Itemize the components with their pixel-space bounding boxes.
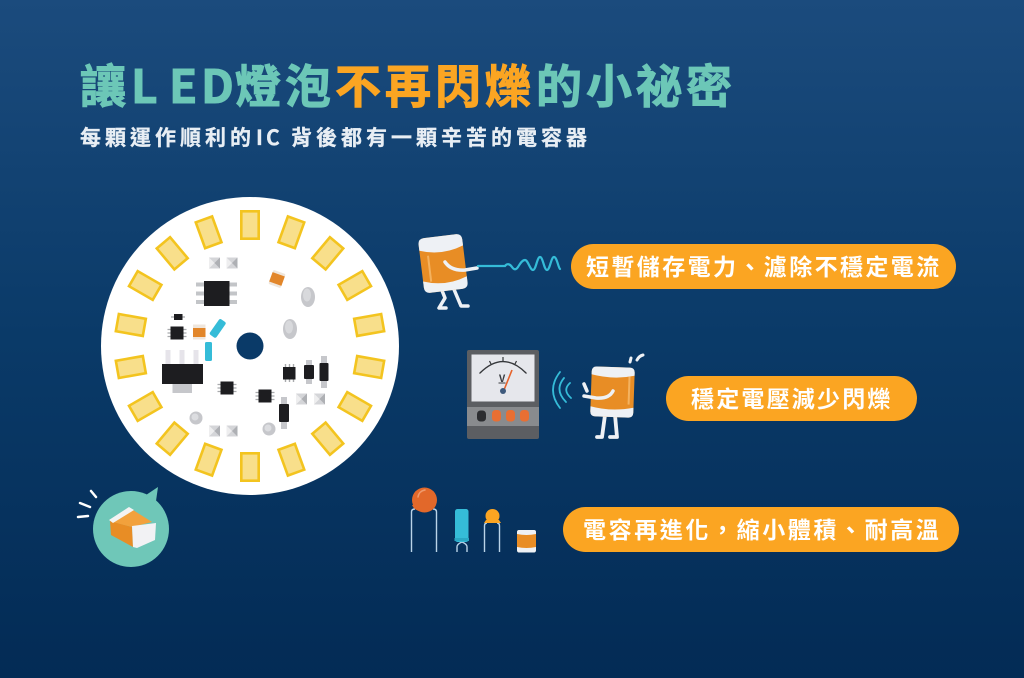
orange disc capacitor: [412, 488, 437, 552]
arm: [445, 262, 477, 270]
legs: [439, 287, 468, 308]
capacitor character pulling current: [418, 234, 560, 308]
legs: [597, 415, 617, 437]
subtitle: 的: [491, 122, 512, 152]
body: [590, 366, 635, 418]
title: D: [201, 51, 234, 117]
solder balls: [190, 412, 276, 436]
subtitle: 顆: [105, 122, 126, 152]
yellow disc capacitor: [484, 509, 501, 552]
current wave: [478, 257, 560, 270]
pill: store power: 短暫儲存電力、濾除不穩定電流: [586, 248, 942, 282]
pill: stabilize voltage: [666, 376, 917, 421]
orange chip capacitor: [268, 270, 286, 288]
subtitle: 苦: [466, 122, 487, 152]
title: 的: [536, 51, 582, 117]
terminal panel: [467, 407, 539, 426]
subtitle: 有: [366, 122, 387, 152]
subtitle: 顆: [416, 122, 437, 152]
highlight ticks: [78, 491, 96, 517]
center mounting hole: [236, 332, 264, 360]
chip capacitor: [109, 507, 156, 548]
subtitle: 一: [391, 122, 412, 152]
subtitle: 後: [316, 122, 337, 152]
cyan electrolytic capacitor: [454, 509, 469, 552]
lower ICs: [218, 364, 296, 402]
LED circuit board: [101, 197, 399, 495]
title: 再: [385, 51, 431, 117]
main IC chip: [196, 281, 237, 306]
title: 爍: [485, 51, 531, 117]
sweat drops: [630, 355, 643, 362]
voltmeter: V: [498, 370, 506, 385]
subtitle: 背: [291, 122, 312, 152]
title: 讓: [80, 51, 126, 117]
signal waves: [553, 372, 571, 408]
voltmeter: [467, 350, 539, 439]
LED ring: [116, 211, 384, 481]
subtitle: 電: [516, 122, 537, 152]
small left ICs: [168, 314, 186, 340]
subtitle: 運: [130, 122, 151, 152]
title: 小: [586, 51, 632, 117]
pill: stabilize voltage: 穩定電壓減少閃爍: [691, 380, 893, 414]
subtitle: I: [256, 122, 263, 152]
capacitor character beside voltmeter: [584, 355, 643, 437]
title: 祕: [636, 51, 682, 117]
orange capacitor: [193, 324, 206, 340]
subtitle: C: [266, 122, 280, 152]
title: E: [169, 51, 197, 117]
title: 燈: [235, 51, 281, 117]
icon: speech bubble with chip capacitor: [78, 487, 169, 567]
pill: store power: [571, 244, 956, 289]
title: 不: [335, 51, 381, 117]
title: L: [131, 51, 158, 117]
subtitle: 都: [341, 122, 362, 152]
capacitor family: [412, 488, 536, 552]
subtitle: 順: [180, 122, 201, 152]
diodes: [279, 356, 328, 429]
voltage regulator: [162, 350, 203, 393]
tiny cylindrical capacitor: [517, 530, 536, 552]
title: 閃: [435, 51, 481, 117]
pill: miniaturize: 電容再進化，縮小體積、耐高溫: [583, 511, 941, 545]
pill: miniaturize: [563, 507, 959, 552]
solder pads: [209, 258, 325, 436]
subtitle: 作: [155, 122, 176, 152]
title: 泡: [285, 51, 331, 117]
title: 密: [686, 51, 732, 117]
cyan capacitors: [205, 318, 226, 361]
meter dial: [472, 354, 534, 402]
body: [418, 234, 468, 293]
subtitle: 辛: [441, 122, 462, 152]
subtitle: 容: [541, 122, 562, 152]
grey oval components: [283, 287, 315, 339]
subtitle: 的: [230, 122, 251, 152]
subtitle: 利: [205, 122, 226, 152]
arms: [584, 384, 613, 398]
subtitle: 每: [80, 122, 101, 152]
subtitle: 器: [566, 122, 587, 152]
